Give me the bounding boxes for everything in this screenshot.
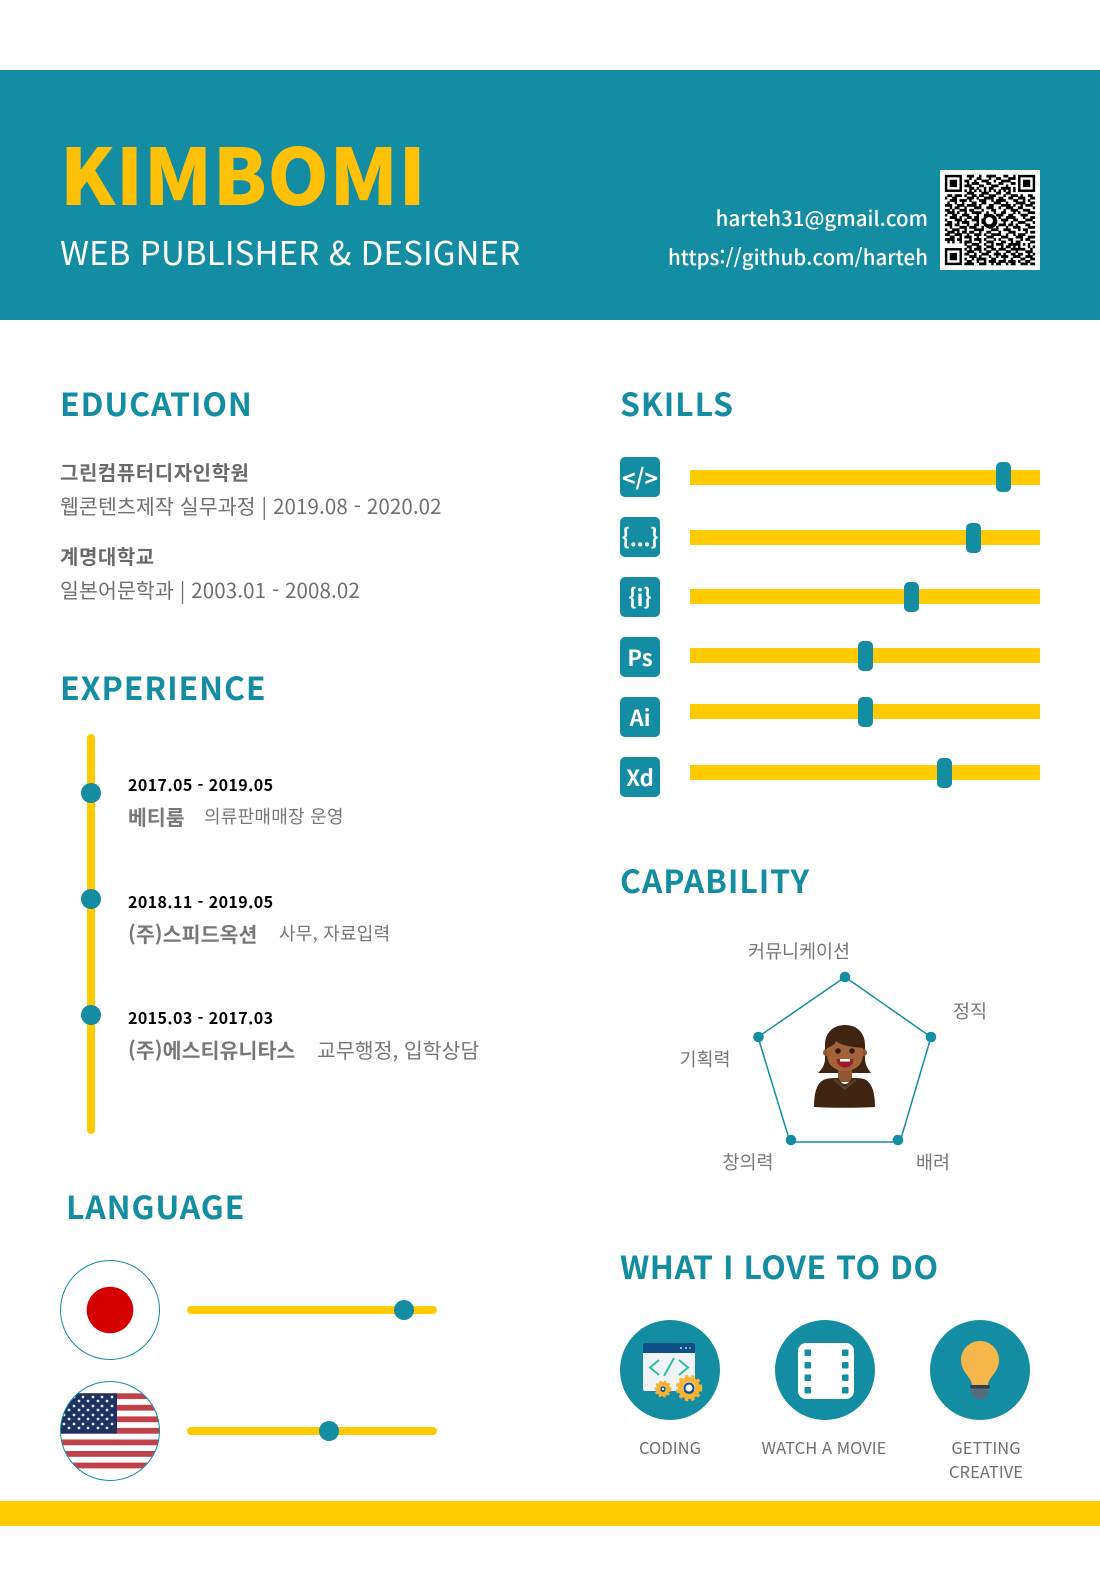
avatar	[814, 1025, 875, 1108]
bar	[690, 765, 1040, 780]
role: 교무행정, 입학상담	[317, 1034, 479, 1064]
skill row: JS	[620, 577, 1040, 617]
English slider knob	[319, 1421, 339, 1441]
label: integrity: 정직	[953, 998, 987, 1024]
heading: what I love to do: WHAT I LOVE TO DO	[620, 1243, 939, 1289]
label: communication: 커뮤니케이션	[748, 938, 850, 964]
label: coding: CODING	[639, 1435, 701, 1459]
icon: html: </>	[622, 460, 658, 494]
name title: KIMBOMI	[60, 116, 426, 228]
heading: experience: EXPERIENCE	[60, 664, 266, 710]
company: (주)에스티유니타스	[128, 1034, 295, 1064]
footer band	[0, 1501, 1100, 1526]
company: (주)스피드옥션	[128, 918, 257, 948]
icon: Ps: Ps	[627, 641, 653, 673]
icon: js	[620, 577, 660, 617]
skill row: Illustrator	[620, 697, 1040, 737]
Japanese slider knob	[394, 1300, 414, 1320]
bar	[690, 704, 1040, 719]
handle	[858, 697, 873, 727]
label: planning: 기획력	[679, 1046, 731, 1072]
bar	[690, 530, 1040, 545]
icon: Japan flag	[60, 1260, 160, 1360]
heading: language: LANGUAGE	[66, 1183, 245, 1229]
English slider	[187, 1427, 437, 1435]
timeline dot 3	[81, 1005, 101, 1025]
bar	[690, 589, 1040, 604]
timeline line	[87, 734, 95, 1134]
line 2: CREATIVE	[949, 1459, 1023, 1483]
icon: Ai: Ai	[630, 701, 650, 733]
heading: skills: SKILLS	[620, 380, 734, 426]
label: watch a movie: WATCH A MOVIE	[762, 1435, 886, 1459]
skill row: XD	[620, 757, 1040, 797]
school name: 계명대학교	[60, 541, 155, 570]
handle	[937, 758, 952, 788]
skill row: CSS	[620, 517, 1040, 557]
experience entry 3	[128, 1005, 479, 1064]
job subtitle: WEB PUBLISHER & DESIGNER	[60, 227, 520, 275]
handle	[996, 462, 1011, 492]
dates: 2017.05 - 2019.05	[128, 772, 273, 796]
label: getting creative	[949, 1435, 1023, 1483]
bar	[690, 470, 1040, 485]
icon: USA flag	[60, 1381, 160, 1481]
label: creativity: 창의력	[722, 1149, 774, 1175]
label: consideration: 배려	[916, 1149, 950, 1175]
icon: Ai	[620, 697, 660, 737]
company: 베티룸	[128, 800, 185, 830]
education entry 1	[60, 457, 442, 520]
radar chart with avatar	[753, 972, 936, 1146]
bar	[690, 648, 1040, 663]
icon: coding	[620, 1320, 720, 1420]
timeline dot 2	[81, 889, 101, 909]
dates: 2018.11 - 2019.05	[128, 889, 273, 913]
contact github: https://github.com/harteh	[668, 241, 928, 271]
experience entry 2	[128, 889, 390, 948]
icon: film	[775, 1320, 875, 1420]
icon: Ps	[620, 637, 660, 677]
heading: education: EDUCATION	[60, 380, 253, 426]
icon: light bulb	[930, 1320, 1030, 1420]
skill row: HTML	[620, 457, 1040, 497]
dates: 2015.03 - 2017.03	[128, 1005, 273, 1029]
icon: css: {...}	[622, 521, 658, 553]
line 1: GETTING	[951, 1435, 1021, 1459]
header band	[0, 70, 1100, 320]
icon: js: {i}	[628, 581, 652, 613]
school name: 그린컴퓨터디자인학원	[60, 457, 250, 486]
course and dates: 웹콘텐츠제작 실무과정 | 2019.08 - 2020.02	[60, 490, 442, 520]
Japanese slider	[187, 1306, 437, 1314]
icon: Xd	[620, 757, 660, 797]
role: 사무, 자료입력	[279, 920, 390, 946]
handle	[904, 582, 919, 612]
heading: capability: CAPABILITY	[620, 857, 810, 903]
handle	[858, 641, 873, 671]
handle	[966, 523, 981, 553]
QR code	[940, 170, 1040, 270]
course and dates: 일본어문학과 | 2003.01 - 2008.02	[60, 574, 360, 604]
icon: Xd: Xd	[626, 761, 654, 793]
role: 의류판매매장 운영	[204, 803, 344, 829]
timeline dot 1	[81, 783, 101, 803]
skill row: Photoshop	[620, 637, 1040, 677]
education entry 2	[60, 541, 360, 604]
experience entry 1	[128, 772, 344, 830]
contact email: harteh31@gmail.com	[716, 202, 928, 232]
